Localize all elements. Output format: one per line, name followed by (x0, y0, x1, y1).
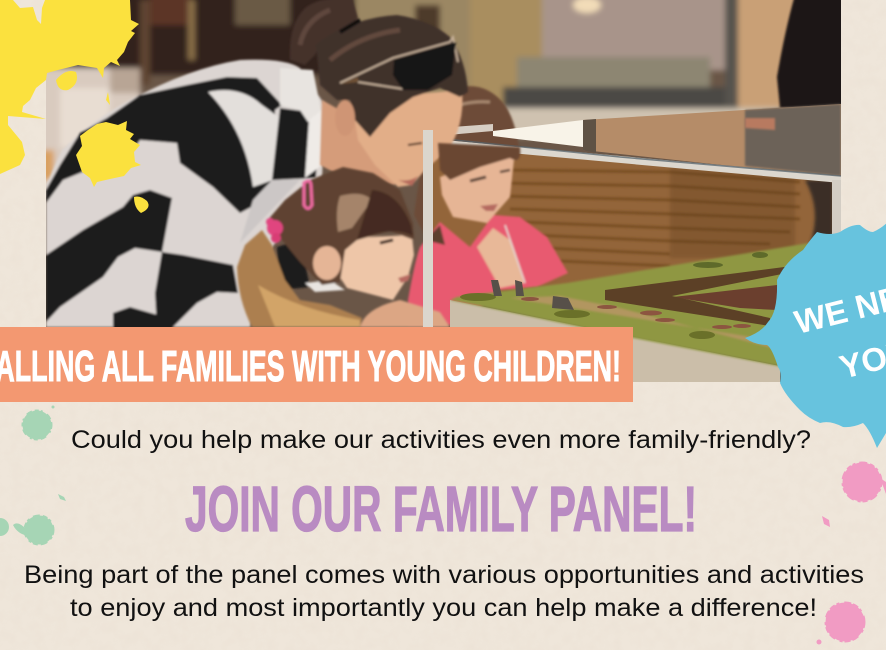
woman: head with sunglasses (290, 0, 468, 187)
description text (24, 561, 864, 622)
description text: to enjoy and most importantly you can help make a difference! (70, 594, 817, 622)
photo: mother and daughters at a museum model display (40, 0, 850, 390)
intro question: Could you help make our activities even more family-friendly? (71, 426, 811, 454)
display case wood backdrop (433, 154, 832, 292)
yellow splat on sweater (76, 121, 141, 187)
girl in pink: hair behind the glass (414, 85, 518, 232)
green paint splats (0, 406, 66, 544)
orange banner (0, 327, 633, 402)
callout text (791, 268, 886, 386)
description text: Being part of the panel comes with various opportunities and activities (24, 561, 864, 589)
upper black stripe (46, 77, 282, 213)
display case glass top (425, 104, 841, 240)
girl in pink: face and cardigan (408, 143, 568, 325)
woman: striped sweater (46, 60, 325, 330)
small girl with ponytail (237, 167, 450, 327)
blue starburst callout (745, 220, 886, 448)
lower black stripes (46, 190, 172, 322)
dark figure in background (777, 0, 845, 108)
battlefield model (450, 240, 830, 384)
pink paint splats (816, 462, 886, 644)
photo background: gallery interior (40, 0, 850, 390)
yellow paint splat, top left (0, 0, 149, 213)
display case front pillar (423, 130, 433, 330)
